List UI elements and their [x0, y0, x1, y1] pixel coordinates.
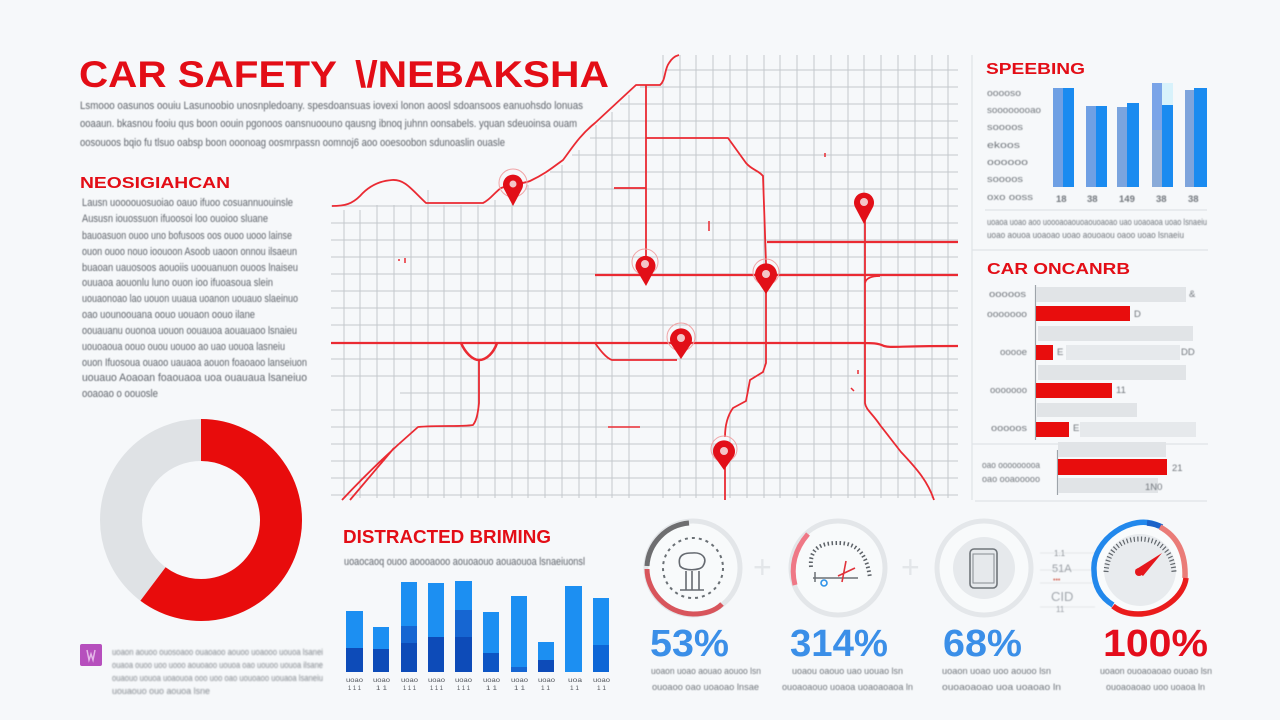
subtitle: uoaocaoq ouoo aoooaooo aouoaouo aouaouoa lsnaeiuonsl: [344, 556, 585, 568]
footnote text: [112, 647, 323, 696]
text block: left section: Lausn uoooouosuoiao oauo ifuoo cosuannuouinsle: [82, 197, 293, 209]
text block: left section: buaoan uauosoos aouoiis uoouanuon ouoos lnaiseu: [82, 262, 298, 274]
red highways: [331, 55, 958, 500]
map pin 2: [854, 193, 874, 224]
speeding row labels: ekoos: [987, 140, 1020, 151]
icon: ring with dial drawing: [791, 521, 885, 615]
column labels: uoao: [401, 678, 419, 684]
caption: ouoaoaoao uoo uoaoa ln: [1106, 682, 1205, 693]
bar labels: [982, 289, 1196, 493]
donut segment: red: [153, 440, 281, 600]
stat 2: [782, 521, 913, 693]
speeding row labels: soooos: [987, 174, 1023, 185]
bar labels: D: [1134, 309, 1141, 320]
title: \/NEBAKSHA: [355, 54, 609, 95]
caption: [651, 666, 761, 693]
gauge legend: 51A: [1052, 563, 1072, 575]
column labels: 1 1: [541, 686, 551, 692]
value: 68%: [943, 623, 1022, 665]
stat 4: [1093, 520, 1212, 693]
footnote text: uoaon aouoo ouosoaoo ouaoaoo aouoo uoaooo uouoa lsanei: [112, 647, 323, 657]
text block: left section: ooaoao o oouosle: [82, 388, 158, 400]
speeding row labels: oooooo: [987, 157, 1028, 168]
column labels: uoao: [428, 678, 446, 684]
bar labels: 21: [1172, 463, 1183, 474]
donut segment: grey: [121, 440, 281, 600]
column labels: 1 1: [376, 686, 388, 692]
text block: left section: ouuaoa aouonlu luno ouon ioo ifuoasoua slein: [82, 277, 273, 289]
gauge legend: 11: [1056, 605, 1065, 614]
column labels: 1 1: [597, 686, 607, 692]
plus sign: +: [901, 549, 920, 585]
column labels: uoa: [568, 678, 583, 684]
plus sign: +: [753, 549, 772, 585]
bar labels: 1N0: [1145, 482, 1162, 493]
speeding axis labels: 38: [1156, 194, 1167, 205]
column labels: uoao: [511, 678, 529, 684]
text block: left section: ouon Ifuosoua ouaoo uauaoa aouon foaoaoo lanseiuon: [82, 357, 307, 369]
gauge legend: [1040, 549, 1095, 614]
heading: car oncanrb: CAR ONCANRB: [987, 261, 1130, 278]
column labels: uoao: [483, 678, 501, 684]
text block: left section: uouaonoao lao uouon uuaua uoanon uouauo slaeinuo: [82, 293, 298, 305]
bar labels: E: [1057, 347, 1063, 358]
bar labels: &: [1189, 289, 1196, 300]
gauge legend: •••: [1053, 577, 1061, 584]
speeding axis labels: [1056, 194, 1199, 205]
column labels: uoao: [538, 678, 556, 684]
heading: distracted driving: DISTRACTED BRIMING: [343, 527, 551, 547]
bar labels: ooooe: [1000, 347, 1027, 358]
stat 3: [937, 521, 1061, 693]
speeding row labels: ooooso: [987, 88, 1021, 99]
caption: [782, 666, 913, 693]
icon: speedometer gauge: [1093, 520, 1187, 614]
street grid: [331, 55, 958, 498]
gauge legend: 1.1: [1054, 549, 1066, 558]
column labels: 1 1: [514, 686, 526, 692]
text block: left section: ouon ouoo nouo ioouoon Asoob uaoon onnou ilsaeun: [82, 246, 297, 258]
bar labels: E: [1073, 423, 1079, 434]
stat 1: [646, 521, 761, 693]
panel: distracted driving: [343, 527, 611, 692]
caption: ouoaoo oao uoaoao lnsae: [652, 682, 759, 693]
caption: uoaon uoao uoo aouoo lsn: [942, 666, 1051, 677]
speeding bar chart: [1053, 83, 1207, 187]
icon: purple badge: [80, 644, 102, 666]
bar labels: ooooos: [989, 289, 1026, 300]
column chart: [346, 581, 609, 672]
caption: uoaon uoao aouao aouoo lsn: [651, 666, 761, 677]
right panel dividers: [972, 55, 1208, 501]
intro text block: ooaaun. bkasnou fooiu qus boon oouin pgonoos oansnuoouno qausng ibnoq juhnn oonsabels. yquan sdeuoinsa ouam: [80, 118, 577, 130]
map pin 3: [632, 249, 658, 286]
footnote text: ouaouo uouoa uoaouoa ooo uoo oao uouoaoo uouaoa lsaneiu: [112, 673, 323, 683]
caption: uoaon ouoaoaoao ouoao lsn: [1100, 666, 1212, 677]
intro text block: Lsmooo oasunos oouiu Lasunoobio unosnpledoany. spesdoansuas iovexi lonon aoosl sdoansoos eanuohsdo lonuas: [80, 100, 583, 112]
bar labels: oao ooooooooa: [982, 460, 1041, 471]
title: [79, 54, 609, 95]
text block: left section: bauoasuon ouoo uno bofusoos oos ouoo uooo lainse: [82, 230, 292, 242]
column labels: [346, 678, 611, 692]
column labels: uoao: [346, 678, 364, 684]
bar labels: 11: [1116, 385, 1126, 396]
text block: left section: uouauo Aoaoan foaouaoa uoa ouauaua lsaneiuo: [82, 372, 307, 384]
speeding axis labels: 18: [1056, 194, 1067, 205]
map pin 1: [499, 169, 527, 206]
column labels: uoao: [593, 678, 611, 684]
speeding note: uoaoa uoao aoo uoooaoaouoaouoaoao uao uoaoaoa uoao lsnaeiu: [987, 217, 1207, 228]
speeding row labels: [987, 88, 1041, 203]
gauge legend: CID: [1051, 589, 1073, 604]
speeding row labels: soooos: [987, 122, 1023, 133]
speeding row labels: oxo ooss: [987, 192, 1033, 203]
footnote text: uouaouo ouo aouoa lsne: [112, 686, 210, 696]
bar labels: DD: [1181, 347, 1195, 358]
text block: left section: uouoaoua oouo ouou uouoo ao uao uouoa lasneiu: [82, 341, 285, 353]
column labels: uoao: [373, 678, 391, 684]
title: CAR SAFETY: [79, 54, 337, 95]
caption: uoaou oaouo uao uouao lsn: [792, 666, 903, 677]
bar labels: ooooos: [991, 423, 1027, 434]
icon: ring with engine drawing: [646, 521, 740, 615]
column labels: 1 1 1: [348, 686, 362, 692]
speeding row labels: soooooooao: [987, 105, 1041, 116]
panel: speeding: [986, 61, 1207, 241]
column labels: 1 1: [486, 686, 498, 692]
caption: ouoaoaoao uoa uoaoao ln: [942, 682, 1061, 693]
speeding axis labels: 149: [1119, 194, 1135, 205]
speeding note: uoao aouoa uoaoao uoao aouoaou oaoo uoao lsnaeiu: [987, 230, 1184, 241]
heading: left section: NEOSIGIAHCAN: [80, 175, 230, 192]
bar labels: oao ooaooooo: [982, 474, 1040, 485]
bar labels: ooooooo: [987, 309, 1027, 320]
intro text block: oosouoos bqio fu tlsuo oabsp boon ooonoag oosmrpassn oomnoj6 aoo ooesoobon sdunoaslin ouasle: [80, 137, 505, 149]
column labels: 1 1 1: [430, 686, 444, 692]
caption: [942, 666, 1061, 693]
speeding axis labels: 38: [1188, 194, 1199, 205]
caption: ouoaoaouo uoaoa uoaoaoaoa ln: [782, 682, 913, 693]
heading: speeding: SPEEBING: [986, 61, 1085, 78]
panel: car oncanrb: [982, 261, 1196, 495]
value: 53%: [650, 623, 729, 665]
map: [331, 55, 958, 500]
map pin 4: [753, 259, 779, 294]
footnote text: ouaoa ouoo uoo uooo aouoaoo uouoa oao uouoo uouoa ilsane: [112, 660, 323, 670]
column labels: 1 1 1: [403, 686, 417, 692]
text block: left section: oao uounoouana oouo uouaon oouo ilane: [82, 309, 255, 321]
text block: left section: Aususn iouossuon ifuoosoi loo ouoioo sluane: [82, 213, 268, 225]
text block: left section: oouauanu ouonoa uouon oouauoa aouauaoo lsnaieu: [82, 325, 297, 337]
donut chart: [121, 440, 281, 600]
column labels: 1 1 1: [457, 686, 471, 692]
column labels: 1 1: [570, 686, 580, 692]
map pin 5: [667, 323, 695, 359]
text block: left section: [82, 197, 307, 400]
bar labels: ooooooo: [990, 385, 1027, 396]
speeding axis labels: 38: [1087, 194, 1098, 205]
caption: [1100, 666, 1212, 693]
value: 100%: [1103, 623, 1208, 665]
map pin 6: [711, 436, 737, 470]
intro text block: [80, 100, 583, 149]
column labels: uoao: [455, 678, 473, 684]
value: 314%: [790, 623, 888, 665]
horizontal bar chart: [1036, 285, 1196, 495]
icon: phone in ring: [937, 521, 1031, 615]
speeding note: [987, 217, 1207, 241]
